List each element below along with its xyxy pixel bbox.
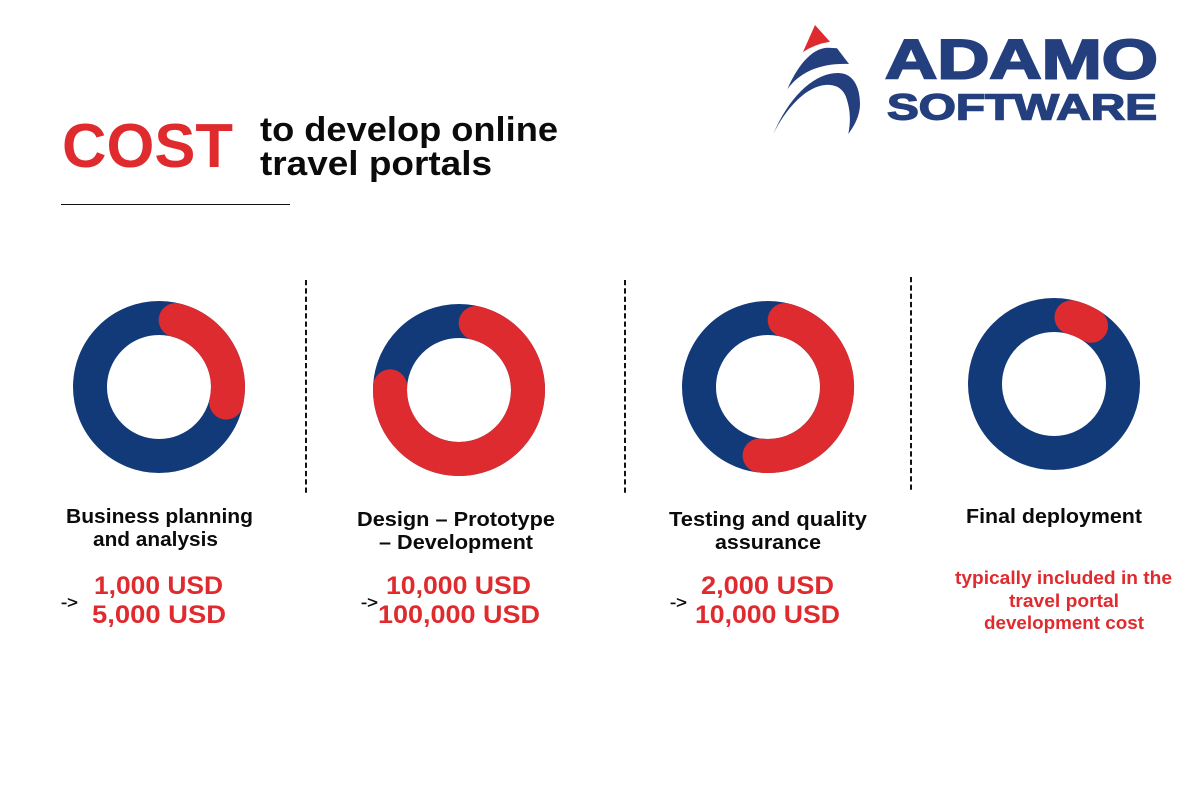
panel: final deployment (955, 315, 1172, 633)
label: business planning and analysis: and analysis (93, 529, 218, 551)
label: design prototype development (357, 509, 555, 554)
donut chart: testing and quality assurance (699, 318, 837, 456)
cost range (92, 572, 226, 629)
arrow: -> (670, 593, 687, 612)
label: business planning and analysis: Business planning (66, 506, 253, 528)
note: typically included: travel portal (1009, 591, 1119, 611)
arrow: -> (61, 593, 78, 612)
label: design prototype development: Design – Prototype (357, 509, 555, 531)
title (62, 111, 558, 183)
label: testing and quality assurance: Testing and quality (669, 509, 868, 531)
logo: Adamo Software (773, 25, 1158, 134)
title subtitle line 1: to develop online (260, 111, 558, 149)
title word: COST: COST (62, 112, 233, 181)
logo wordmark: ADAMO: ADAMO (885, 28, 1158, 90)
donut chart: business planning (90, 318, 228, 456)
label: testing and quality assurance (669, 509, 868, 554)
cost range: 5,000 USD (92, 601, 226, 629)
note: typically included: typically included in the (955, 568, 1172, 588)
donut chart: final deployment (985, 315, 1123, 453)
cost range: 2,000 USD (701, 572, 834, 600)
cost range (695, 572, 840, 629)
note: typically included: development cost (984, 613, 1144, 633)
panel: design prototype development (357, 321, 555, 629)
note: typically included (955, 568, 1172, 633)
arrow: -> (361, 593, 378, 612)
cost range: 100,000 USD (378, 601, 540, 629)
title subtitle line 2: travel portals (260, 145, 492, 183)
cost range: 1,000 USD (94, 572, 223, 600)
label: final deployment: Final deployment (966, 506, 1142, 528)
label: design prototype development: – Development (379, 532, 533, 554)
logo wordmark: SOFTWARE: SOFTWARE (887, 86, 1157, 128)
cost range (378, 572, 540, 629)
label: business planning and analysis (66, 506, 253, 551)
icon: logo mark (773, 25, 860, 134)
donut chart: design prototype development (390, 321, 528, 459)
cost range: 10,000 USD (695, 601, 840, 629)
cost range: 10,000 USD (386, 572, 531, 600)
panel: business planning and analysis (61, 318, 253, 629)
panel: testing and quality assurance (669, 318, 868, 629)
label: testing and quality assurance: assurance (715, 532, 821, 554)
